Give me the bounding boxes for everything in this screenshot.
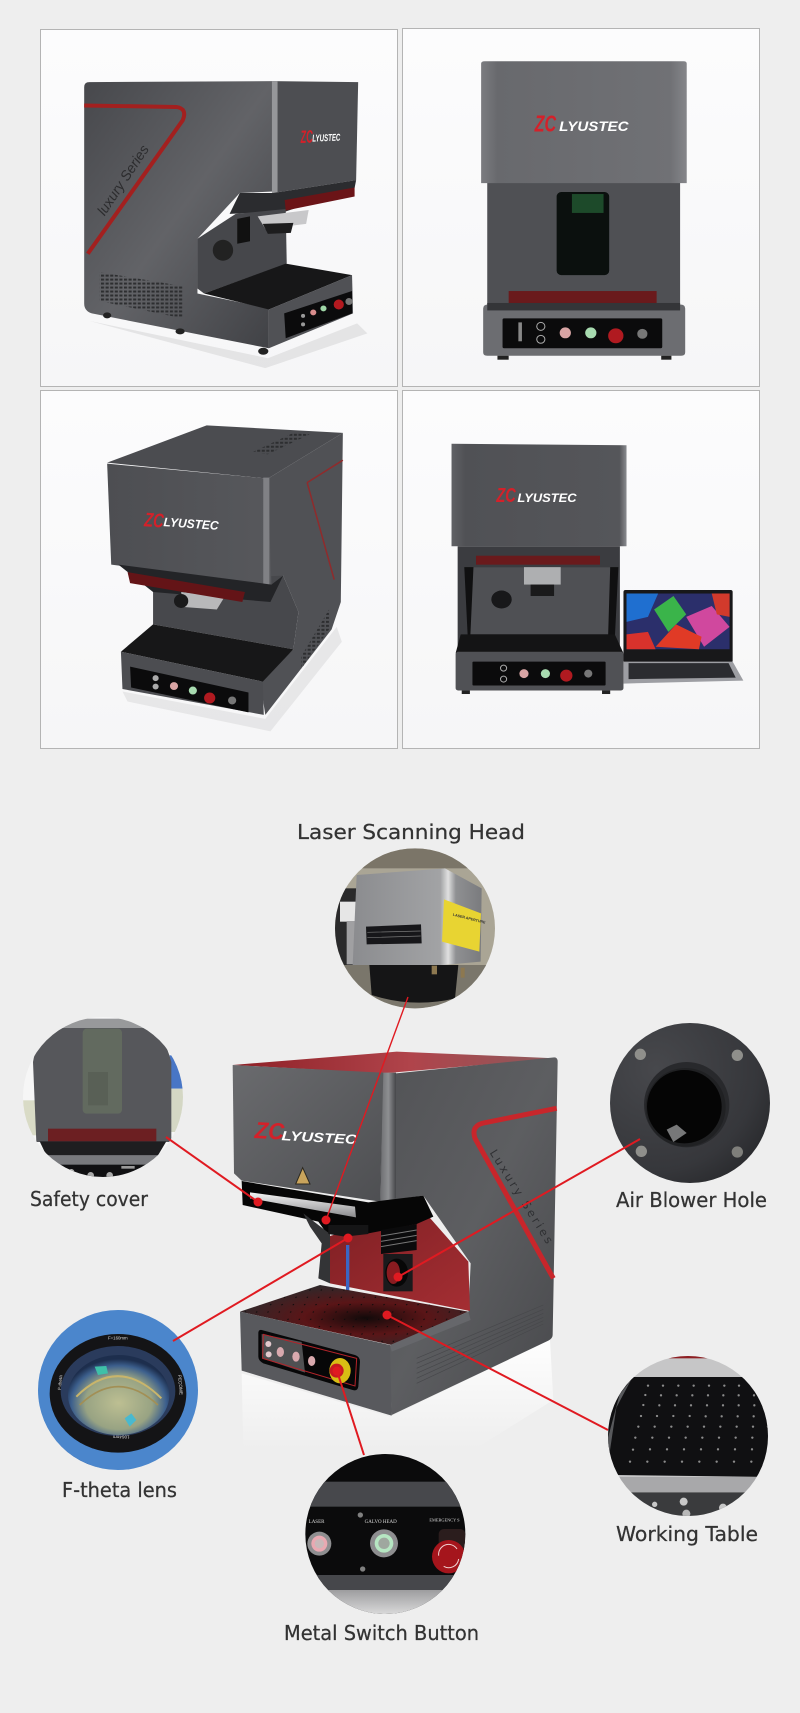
- silver handle: [250, 1192, 356, 1217]
- callout lines and dots: [166, 997, 640, 1455]
- top face in red: [233, 1052, 557, 1073]
- black hood: [242, 1181, 433, 1283]
- logo: LYUSTEC on main machine: LYUSTEC: [281, 1128, 358, 1147]
- label: Safety cover: Safety cover: [30, 1187, 149, 1211]
- label: Working Table: Working Table: [616, 1522, 758, 1546]
- circle photo: safety cover: [23, 1018, 183, 1177]
- front cover: [233, 1065, 383, 1202]
- label: F-theta lens: F-theta lens: [62, 1478, 177, 1502]
- lens ring engravings: 1064nm: [113, 1435, 130, 1440]
- blue laser beam: [346, 1245, 349, 1305]
- corner strip: [381, 1073, 396, 1202]
- logo: LYUSTEC on front view: ZC: [534, 111, 556, 136]
- working table: [240, 1285, 468, 1345]
- switch captions: LASER: [309, 1520, 325, 1525]
- machine elevated view: [107, 425, 343, 731]
- panel: three-quarter side view of machine: [40, 30, 398, 386]
- logo: LYUSTEC on laptop view: LYUSTEC: [517, 491, 577, 505]
- warning triangle icon: [296, 1168, 310, 1184]
- logo: LYUSTEC on elevated view: ZC: [143, 510, 165, 533]
- panel: front view of machine: [402, 28, 760, 386]
- logo: LYUSTEC on elevated view: [143, 510, 220, 536]
- switch captions: GALVO HEAD: [365, 1520, 397, 1525]
- lens ring engravings: F-theta: [57, 1375, 63, 1390]
- circle photo: F-theta lens: [38, 1310, 198, 1470]
- label on laser head: LASER APERTURE: [452, 913, 486, 925]
- machine reflection: [242, 1340, 553, 1450]
- logo: LYUSTEC on elevated view: LYUSTEC: [163, 515, 220, 533]
- logo: LYUSTEC on side view: LYUSTEC: [312, 133, 341, 145]
- lens ring engravings: F=160mm: [108, 1335, 128, 1340]
- vent and scan head: [328, 1224, 417, 1254]
- front base: [240, 1312, 392, 1416]
- circle photo: laser scanning head: [335, 848, 495, 1008]
- logo: LYUSTEC on main machine: [253, 1117, 358, 1148]
- panel: front view with laptop for scale: [402, 390, 760, 748]
- switch captions: EMERGENCY S: [429, 1517, 460, 1522]
- machine side view: [84, 81, 367, 368]
- lens ring engravings: PECOME: [177, 1375, 184, 1395]
- label: Metal Switch Button: Metal Switch Button: [284, 1621, 479, 1645]
- logo: LYUSTEC on side view: ZC: [300, 127, 314, 147]
- logo: LYUSTEC on front view: [534, 111, 629, 136]
- interior red wall: [328, 1207, 470, 1311]
- right side panel: [380, 1057, 558, 1415]
- main machine illustration: [233, 1052, 558, 1450]
- circle photo: air blower hole: [610, 1023, 770, 1183]
- label: Air Blower Hole: Air Blower Hole: [616, 1188, 767, 1212]
- logo: LYUSTEC on side view: [300, 126, 341, 147]
- engraved series name: Luxury Series: [487, 1147, 556, 1246]
- control panel: [258, 1330, 360, 1390]
- machine beside laptop: [452, 444, 627, 694]
- logo: LYUSTEC on front view: LYUSTEC: [559, 118, 629, 134]
- switch captions: [309, 1517, 460, 1525]
- logo: LYUSTEC on main machine: ZC: [253, 1117, 286, 1145]
- panel: elevated view of machine: [40, 390, 398, 748]
- circle photo: working table: [608, 1356, 768, 1516]
- lens ring engravings: [57, 1335, 184, 1440]
- heading: Laser Scanning Head: Laser Scanning Head: [297, 820, 525, 844]
- logo: LYUSTEC on laptop view: [496, 485, 577, 507]
- red stripe on side: [474, 1108, 557, 1278]
- side engraving: Luxury Series: luxury Series: [94, 142, 152, 218]
- circle photo: metal switch buttons: [305, 1454, 466, 1614]
- logo: LYUSTEC on laptop view: ZC: [496, 485, 516, 507]
- machine front view: [481, 61, 687, 360]
- icon: laptop: [623, 590, 743, 684]
- air blower hole: [383, 1254, 413, 1291]
